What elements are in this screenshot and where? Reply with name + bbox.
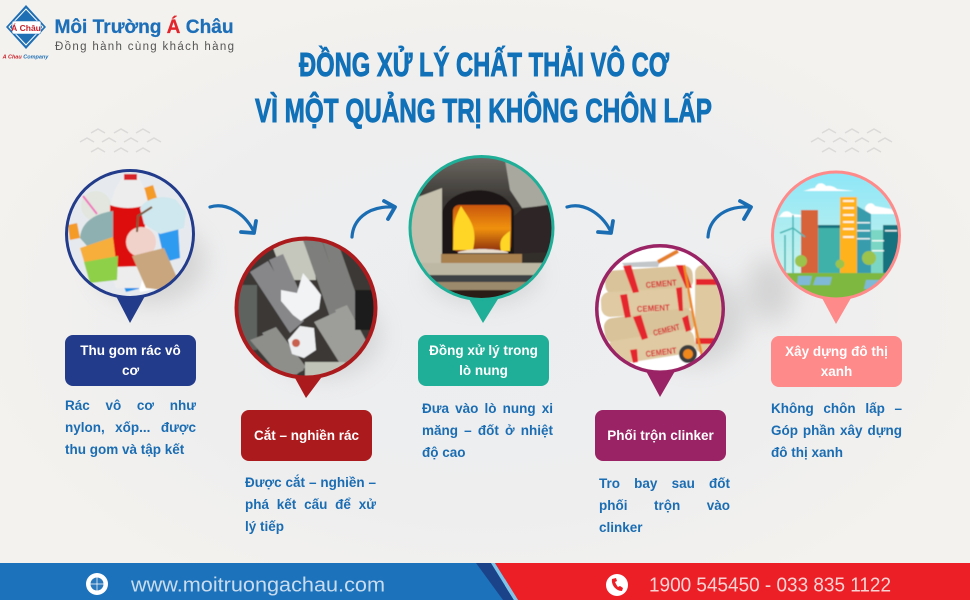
text 2: Được cắt – nghiền –: [245, 475, 376, 490]
logo mark: [2, 5, 49, 60]
step 4 image pin: cement bags: CEMENT: [637, 302, 671, 314]
arrow 3: [567, 206, 613, 233]
text 2: [245, 474, 376, 534]
title: VÌ MỘT QUẢNG TRỊ KHÔNG CHÔN LẤP: [255, 91, 712, 129]
text 4: Tro bay sau đốt: [599, 476, 730, 491]
soft shadows: [95, 220, 794, 377]
text 3: [422, 401, 553, 460]
step 4 image pin: cement bags: CEMENT: [645, 345, 678, 359]
label 2: Cắt – nghiền rác: [254, 428, 359, 442]
text 3: Đưa vào lò nung xi: [422, 401, 553, 416]
text 4: [599, 476, 730, 535]
text 3: độ cao: [422, 445, 466, 460]
logo name: Môi Trường Á Châu: [54, 16, 234, 38]
text 1: Rác vô cơ như: [65, 398, 196, 413]
step 3 image pin: kiln: [408, 155, 555, 323]
arrow 1: [210, 206, 256, 233]
decorative chevrons right: [811, 129, 892, 152]
text 2: phá kết cấu để xử: [245, 497, 376, 512]
step 4 image pin: cement bags: CEMENT: [645, 277, 678, 290]
text 2: lý tiếp: [245, 519, 284, 534]
logo: [2, 5, 234, 60]
logo tagline: Đồng hành cùng khách hàng: [55, 41, 234, 53]
label 5: Xây dựng đô thị xanh: [785, 344, 888, 378]
text 1: nylon, xốp... được: [65, 420, 196, 435]
logo mark: Á Châu: [11, 23, 41, 33]
label 3: Đồng xử lý trong lò nung: [429, 342, 538, 378]
arrow 4: [708, 201, 751, 237]
label 4: Phối trộn clinker: [607, 428, 714, 442]
text 3: măng – đốt ở nhiệt: [422, 423, 553, 438]
step 2 image pin: shredder: [234, 236, 380, 398]
step 1 image pin: inorganic waste: [65, 169, 195, 323]
step 4 image pin: cement bags: [595, 244, 729, 397]
phone icon: [606, 574, 628, 596]
label 1: [65, 335, 196, 386]
label 4: [595, 410, 726, 461]
phone numbers: 1900 545450 - 033 835 1122: [649, 574, 891, 596]
text 5: Góp phần xây dựng: [771, 423, 902, 438]
title: ĐỒNG XỬ LÝ CHẤT THẢI VÔ CƠ: [299, 45, 670, 83]
text 1: [65, 398, 196, 457]
text 4: phối trộn vào: [599, 498, 730, 513]
arrow 2: [352, 201, 395, 237]
decorative chevrons left: [80, 129, 161, 152]
step 4 image pin: cement bags: CEMENT: [652, 322, 681, 338]
text 5: [771, 401, 902, 460]
text 4: clinker: [599, 520, 643, 535]
label 5: [771, 336, 902, 387]
globe icon: [86, 573, 108, 595]
logo mark: A Chau Company: [2, 54, 49, 60]
text 1: thu gom và tập kết: [65, 442, 184, 457]
footer band: [0, 563, 970, 600]
label 3: [418, 335, 549, 386]
text 5: Không chôn lấp –: [771, 401, 902, 416]
label 1: Thu gom rác vô cơ: [80, 342, 181, 378]
label 2: [241, 410, 372, 461]
title: [255, 45, 712, 129]
text 5: đô thị xanh: [771, 445, 843, 460]
step 5 image pin: green city: [771, 170, 901, 324]
website: www.moitruongachau.com: [130, 574, 385, 596]
